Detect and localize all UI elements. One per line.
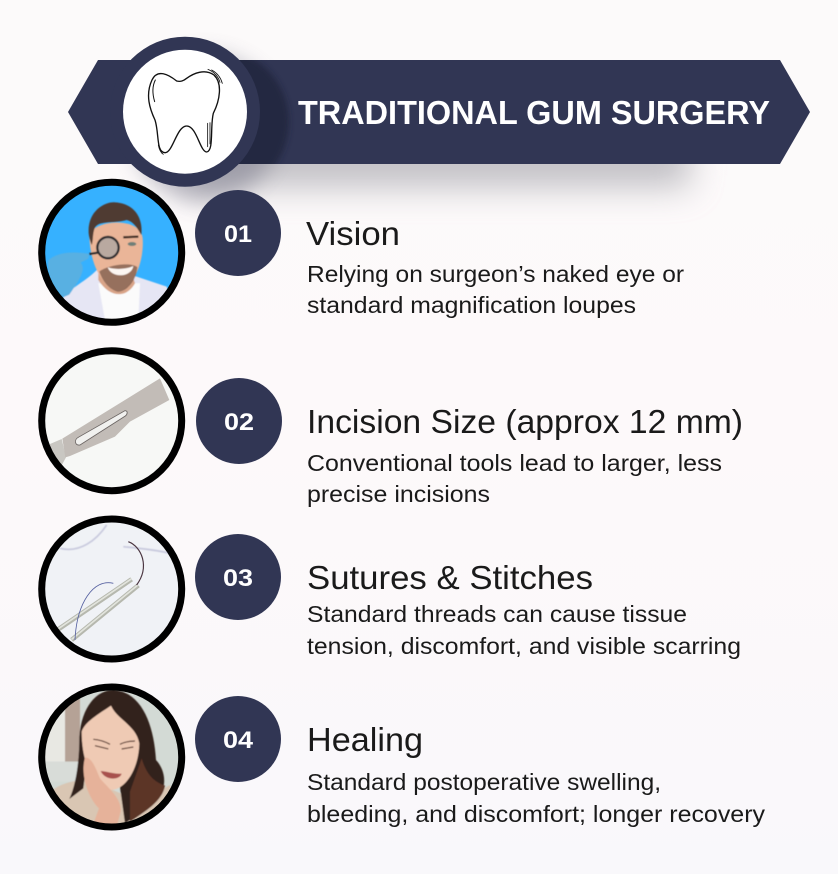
text block: incision size: Conventional tools lead to larger, less: [307, 450, 722, 476]
text block: incision size: [307, 403, 743, 507]
hand: [84, 758, 121, 824]
beard: [99, 264, 137, 292]
number 02: 02: [224, 409, 254, 436]
photo: suture needle: [40, 516, 185, 661]
magnifier: [97, 237, 119, 258]
ring: [42, 687, 182, 827]
photo: scalpel: [40, 348, 185, 493]
hair: [69, 690, 164, 823]
eyes and mouth: [93, 739, 135, 749]
text block: healing: bleeding, and discomfort; longer recovery: [307, 801, 766, 827]
text block: healing: Standard postoperative swelling,: [307, 769, 661, 795]
banner shadow: [131, 54, 690, 202]
text block: sutures and stitches: Sutures & Stitches: [307, 559, 593, 596]
text block: sutures and stitches: [307, 559, 741, 659]
glove: [48, 253, 89, 297]
tooth badge: [110, 37, 260, 187]
number 03: 03: [223, 565, 253, 592]
smile: [108, 266, 133, 275]
lab coat: [62, 270, 168, 318]
text block: healing: [307, 721, 766, 827]
face: [88, 222, 144, 278]
ring: [42, 351, 182, 491]
number 01: [195, 190, 281, 276]
hair: [89, 202, 142, 245]
number 04: 04: [223, 727, 254, 754]
text block: vision: [306, 215, 684, 318]
text block: sutures and stitches: Standard threads can cause tissue: [307, 601, 687, 627]
ring: [42, 519, 182, 659]
face: [82, 706, 139, 790]
neck: [98, 273, 135, 294]
number 01: 01: [224, 221, 252, 248]
number 03: [195, 534, 281, 620]
badge shadow on banner: [239, 60, 290, 164]
text block: vision: Relying on surgeon’s naked eye or: [307, 261, 684, 287]
text block: vision: standard magnification loupes: [307, 292, 636, 318]
photo: dentist with magnifying glass: [40, 180, 185, 327]
title: TRADITIONAL GUM SURGERY: [298, 94, 770, 131]
photo: woman with toothache: [40, 684, 185, 832]
number 04: [195, 696, 281, 782]
brows and eye: [122, 235, 139, 239]
text block: sutures and stitches: tension, discomfort, and visible scarring: [307, 633, 741, 659]
text block: vision: Vision: [306, 215, 400, 252]
blouse: [50, 780, 180, 832]
icon: tooth: [149, 69, 222, 154]
text block: incision size: Incision Size (approx 12 mm): [307, 403, 743, 440]
ring: [42, 182, 182, 322]
text block: healing: Healing: [307, 721, 423, 758]
number 02: [196, 378, 282, 464]
title banner: [68, 60, 810, 164]
text block: incision size: precise incisions: [307, 481, 490, 507]
